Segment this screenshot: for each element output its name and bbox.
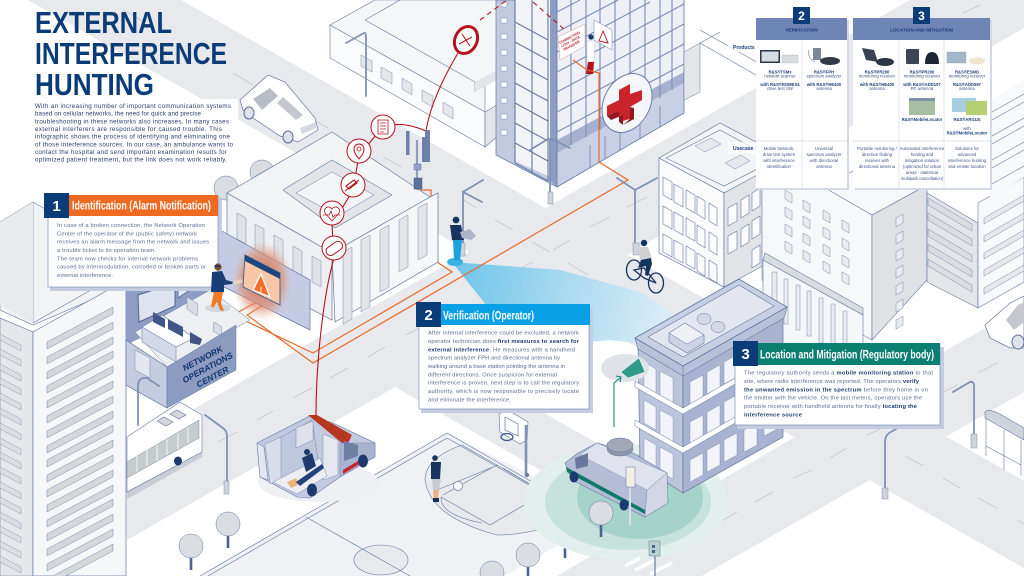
row labels	[728, 40, 756, 154]
products: PR200 with HE400: R&S®PR200	[865, 70, 890, 74]
tall grey building behind the annex	[762, 150, 927, 340]
panel: step 1 identification: receives an alarm message from the network and issues	[57, 240, 209, 246]
panel: step 3 location and mitigation: interference source	[744, 412, 803, 418]
right facade	[332, 193, 438, 322]
panel: step 1 identification: caused by intermodulation, corroded or broken parts or	[57, 265, 206, 271]
ambulance and hospital data icons	[320, 23, 482, 260]
products: PR200 with ADD107: R&S®PR200	[910, 70, 935, 74]
products: ESMD with ADD597: R&S®ARGUS	[953, 117, 981, 122]
introduction text: contact the hospital and send important examination results for	[35, 149, 227, 156]
left tower building	[0, 202, 126, 576]
panel: verification products: identification	[767, 164, 792, 169]
patient on stretcher	[296, 464, 324, 486]
panel: step 3 location and mitigation: portable receiver with handheld antenna for finally locating the	[744, 404, 918, 410]
panel: step 2 verification: 2	[424, 307, 433, 324]
right building with slats	[927, 80, 1024, 308]
panel: step 1 identification	[44, 193, 222, 291]
bus	[127, 402, 202, 499]
green arrow to emitter	[614, 376, 621, 427]
sign panel	[167, 325, 236, 408]
title: EXTERNAL	[35, 5, 172, 40]
operator man in orange trousers	[205, 263, 243, 312]
icon: heart rate	[320, 201, 344, 225]
panel: step 2 verification: spectrum analyzer FPH and directional antenna by	[428, 356, 560, 362]
products: PR200 with HE400: with R&S®HE400	[859, 82, 895, 87]
products: ESMD with ADD597	[947, 52, 988, 136]
panel: step 1 identification: Identification (Alarm Notification)	[72, 198, 211, 212]
panel: verification products: spectrum analyzer	[806, 152, 842, 157]
panel: step 3 location and mitigation: the emitter with the vehicle. On the last meters, operators use the	[744, 396, 922, 402]
panel: location and mitigation products: Automated interference	[900, 146, 945, 151]
products: PR200 with HE400	[859, 48, 896, 91]
icon: capsule	[322, 236, 346, 260]
basketball hoop	[499, 410, 529, 477]
panel: step 2 verification: Verification (Operator)	[443, 308, 534, 322]
tree in front of van	[589, 501, 613, 537]
doctor with screens: LOST - DATA	[560, 35, 581, 48]
products: PR200 with ADD107: monitoring receiver	[904, 74, 941, 78]
panel: step 1 identification: 1	[52, 198, 61, 215]
panel: step 2 verification	[416, 302, 593, 413]
doctor with screens: CONNECTION	[559, 31, 581, 45]
products: FPH: antenna	[816, 86, 832, 91]
products: ESMD with ADD597: R&S®MobileLocator	[947, 130, 988, 136]
low block right of hospital	[684, 30, 760, 100]
products: PR200 with ADD107: RF antenna	[911, 86, 934, 91]
products: ESMD with ADD597: antenna	[959, 86, 975, 91]
left facade	[227, 193, 332, 320]
panel: location and mitigation products: areas - statistical	[906, 170, 938, 175]
roof	[227, 132, 430, 253]
panel: step 3 location and mitigation: 3	[741, 346, 750, 363]
panel: step 3 location and mitigation: The regulatory authority sends a mobile monitoring station to that	[744, 371, 933, 377]
panel: location and mitigation products: directional antenna	[859, 164, 896, 169]
introduction text: troubleshooting in these networks also increases. In many cases	[35, 118, 229, 125]
products: TSMx: drive test SW	[767, 86, 794, 91]
introduction text: of those interference sources. In our case, an ambulance wants to	[35, 141, 234, 148]
panel: step 2 verification: walking around a base station pointing the antenna in	[427, 364, 565, 370]
hospital left face	[496, 0, 557, 187]
products: FPH: R&S®FPH	[814, 70, 834, 74]
crosswalk and traffic light	[625, 541, 672, 576]
products: ESMD with ADD597: monitoring receiver	[949, 74, 986, 78]
street lamp by operations center	[138, 378, 159, 425]
panel: verification products	[756, 7, 849, 190]
low building top centre	[330, 0, 497, 147]
panel: step 2 verification: operator technician does first measures to search for	[428, 339, 580, 345]
operations center interior and sign: NETWORK	[181, 344, 224, 373]
monitoring rings	[524, 444, 728, 560]
orange network links	[233, 60, 628, 363]
panel: location and mitigation products: direction finding	[862, 152, 893, 157]
introduction text: optimized patient treatment, but the link does not work reliably.	[35, 157, 227, 164]
panel: location and mitigation products	[853, 7, 992, 190]
panel: verification products: VERIFICATION	[785, 28, 818, 32]
title: HUNTING	[35, 67, 154, 102]
panel: step 2 verification: and eliminate the interference.	[428, 397, 511, 403]
products: FPH: with R&S®HE400	[806, 82, 842, 87]
introduction text: external interferers are responsible for caused trouble. This	[35, 126, 222, 133]
products: TSMx: network scanner	[764, 74, 796, 78]
products: ESMD with ADD597: R&S®ESMD	[955, 70, 979, 74]
regulatory building	[635, 279, 787, 493]
panel: step 2 verification: authority, which is now responsible to precisely locate	[428, 389, 579, 395]
panel: location and mitigation products: mitigation solution	[905, 158, 940, 163]
panel: step 2 verification: After internal interference could be excluded, a network	[428, 331, 579, 337]
operations center interior and sign	[126, 280, 250, 408]
panel: step 1 identification: In case of a broken connection, the Network Operation	[57, 223, 205, 229]
interference source emitter	[601, 354, 649, 382]
products table	[728, 7, 992, 190]
panel: step 2 verification: different directions. Once suspicion for external	[428, 372, 557, 378]
products: FPH	[806, 48, 842, 91]
panel: location and mitigation products: LOCATION AND MITIGATION	[890, 28, 954, 32]
beam of directional antenna	[452, 262, 700, 350]
street lamp near low building	[346, 33, 366, 96]
panel: verification products: with directional	[810, 158, 838, 163]
panel: location and mitigation products: and emitter location	[948, 164, 986, 169]
products: PR200 with ADD107	[902, 49, 943, 122]
introduction text: With an increasing number of important communication systems	[35, 103, 231, 110]
products: PR200 with HE400: antenna	[869, 86, 885, 91]
panel: step 2 verification: interference is proven, next step is to call the regulatory	[428, 381, 579, 387]
monitoring van	[565, 438, 668, 517]
parked car right	[985, 296, 1024, 349]
icon: document	[371, 115, 395, 139]
panel: location and mitigation products: 3	[918, 9, 925, 23]
panel: step 1 identification: The team now checks for internal network problems	[57, 256, 198, 262]
street lamp by bus	[205, 415, 229, 494]
introduction text: infographic shows the process of identifying and eliminating one	[35, 134, 231, 141]
panel: location and mitigation products: interference hunting	[948, 158, 987, 163]
alarm screen	[243, 255, 280, 305]
basketball player	[431, 455, 462, 502]
panel: verification products: with interference	[763, 158, 795, 163]
panel: location and mitigation products: (optimized for urban	[903, 164, 942, 169]
panel: location and mitigation products: advanced	[958, 152, 977, 157]
hospital red cross sign	[592, 65, 662, 141]
street lamp at hospital	[530, 139, 570, 196]
products: PR200 with ADD107: R&S®MobileLocator	[902, 117, 943, 122]
technician with handheld antenna	[447, 217, 476, 266]
panel: step 1 identification: Center of the operator of the (public safety) network	[57, 231, 197, 237]
panel: step 3 location and mitigation: Location and Mitigation (Regulatory body)	[760, 348, 934, 362]
products: FPH: spectrum analyzer	[806, 74, 842, 78]
monitors	[153, 312, 202, 345]
network operations center building	[220, 132, 438, 330]
panel: step 3 location and mitigation	[733, 341, 944, 429]
street lamps lower right	[882, 382, 977, 499]
panel: verification products: Universal	[815, 146, 833, 151]
title	[35, 5, 227, 102]
panel: location and mitigation products: hunting and	[911, 152, 934, 157]
products: ESMD with ADD597: with	[963, 126, 971, 131]
doctor with screens	[558, 20, 612, 74]
panel: step 1 identification: external interference.	[57, 273, 113, 279]
panel: location and mitigation products: Solutions for	[955, 146, 980, 151]
alarm wall	[220, 230, 310, 330]
panel: step 3 location and mitigation: the unwanted emission in the spectrum before they home in on	[744, 387, 928, 393]
panel: location and mitigation products: multipath cancellation)	[901, 176, 944, 181]
products: ESMD with ADD597: R&S®ADD597	[953, 82, 982, 87]
panel: location and mitigation products: receiver with	[865, 158, 890, 163]
mobile mast	[626, 467, 635, 525]
products: TSMx	[759, 50, 800, 91]
operations center interior and sign: CENTER	[195, 364, 231, 390]
trees behind the operations building	[214, 160, 274, 200]
products: PR200 with HE400: monitoring receiver	[859, 74, 896, 78]
cell tower	[406, 130, 430, 190]
ambulance	[257, 415, 378, 502]
basketball court ground	[200, 433, 610, 576]
hospital building	[496, 0, 684, 204]
panel: verification products: 2	[798, 9, 805, 23]
annex with vertical slats	[763, 253, 863, 345]
icon: location pin	[347, 139, 371, 163]
panel: verification products: drive test system	[763, 152, 796, 157]
street lamps at intersection	[459, 178, 657, 256]
bus shelter	[985, 410, 1024, 476]
row labels: Products	[733, 45, 755, 51]
panel: verification products: antenna	[816, 164, 832, 169]
cyclist	[626, 240, 664, 293]
panel: step 2 verification: external interference. He measures with a handheld	[428, 347, 575, 353]
doctor with screens: TRANSFER	[562, 39, 581, 52]
introduction text: based on cellular networks, the need for quick and precise	[35, 111, 202, 118]
panel: verification products: Mobile Network,	[764, 146, 794, 151]
icon: syringe	[341, 173, 365, 197]
right building with windows	[659, 123, 790, 287]
hospital right face	[557, 0, 684, 190]
row labels: Usecase	[733, 146, 754, 152]
red wireless link	[316, 0, 565, 415]
introduction text	[30, 99, 238, 165]
icon: hospital link	[450, 23, 482, 57]
panel: step 1 identification: a trouble ticket to its operation team.	[57, 248, 156, 254]
title: INTERFERENCE	[35, 36, 227, 71]
panel: step 3 location and mitigation: site, where radio interference was reported. The operators verify	[744, 379, 920, 385]
alarm screen: !	[260, 287, 262, 294]
panel: location and mitigation products: Portable monitoring /	[857, 146, 898, 151]
products: PR200 with ADD107: with R&S®ADD107	[902, 82, 941, 87]
trees	[179, 512, 577, 576]
products: TSMx: with R&S®ROMES4	[759, 82, 800, 87]
products: TSMx: R&S®TSMx	[768, 70, 792, 74]
operations center interior and sign: OPERATIONS	[181, 350, 235, 385]
parked car top left	[240, 75, 318, 143]
